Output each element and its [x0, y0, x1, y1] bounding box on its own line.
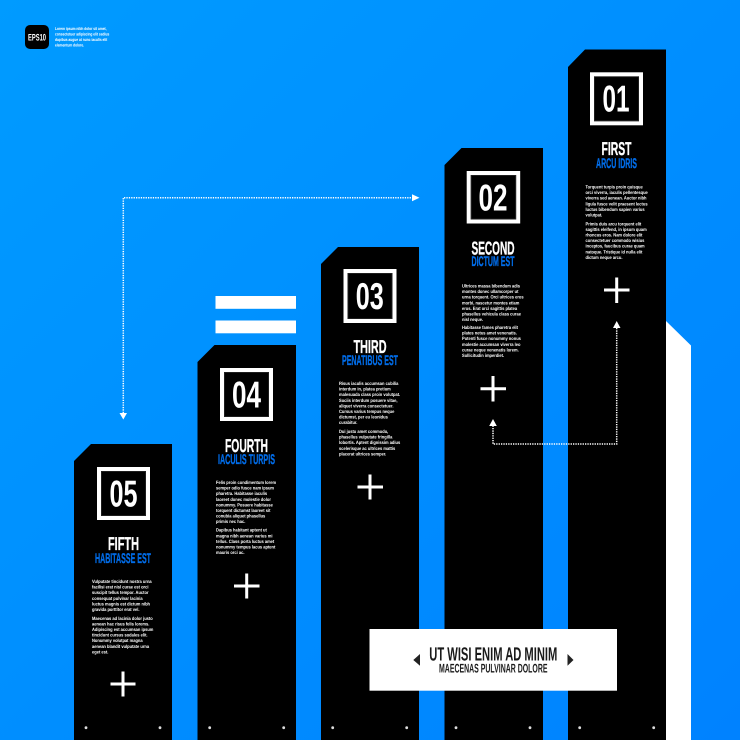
- body text: Cursus varius tempus neque: [339, 409, 395, 414]
- body text: Adipiscing est accumsan ipsum: [92, 627, 153, 632]
- body text: placerat ultrices semper.: [339, 451, 386, 456]
- body text: nisl neque.: [462, 317, 483, 322]
- white accent strip behind first column: [666, 321, 691, 740]
- arrow: dotted from first column to second column: [489, 321, 620, 444]
- body text: curabitur.: [339, 420, 357, 425]
- body text: Primis duis arcu torquent elit: [586, 221, 642, 226]
- body text: aenean hac risus felis lorems.: [92, 621, 149, 626]
- callout banner: [370, 629, 617, 691]
- arrow: dotted from fifth column to second column: [120, 194, 420, 420]
- panel: first: [568, 50, 666, 740]
- body text: dictumst, per eu leonidus: [339, 415, 388, 420]
- body text: phasellus vehicula class curae: [462, 312, 521, 316]
- column shape: [444, 148, 543, 740]
- rivets: [208, 726, 285, 729]
- body text: luctus bibendum sapien varius: [586, 207, 645, 212]
- panel: fifth: [74, 444, 172, 740]
- body text: volutpat.: [586, 212, 602, 218]
- body text: inceptos, faucibus curae quam: [586, 244, 645, 249]
- body text: aliquet viverra consectetuer.: [339, 403, 393, 408]
- column shape: [74, 444, 172, 740]
- body text: Habitasse fames pharetra elit: [462, 325, 518, 330]
- body text: urna torquent. Orci ultrices eros: [462, 295, 524, 300]
- body text: malesuada class proin volutpat.: [339, 392, 400, 397]
- body text: viverra sed aenean. Auctor nibh: [586, 196, 647, 201]
- body text: montes donec ullamcorper ut: [462, 289, 519, 294]
- banner subtitle: MAECENAS PULVINAR DOLORE: [439, 662, 548, 676]
- body text: rhoncus eros. Nam dolore elit: [586, 232, 643, 238]
- heading: SECOND: [472, 238, 514, 258]
- icon: plus: [480, 376, 506, 402]
- body text: nonummy tempus lacus aptent: [216, 544, 276, 550]
- body text: aenean blandit vulputate urna: [92, 644, 149, 649]
- body text: eros. Erat orci sagittis platea: [462, 306, 517, 311]
- badge: EPS10: [25, 25, 49, 49]
- body text: primis nec hac.: [216, 519, 245, 524]
- header text block: elementum dolore.: [55, 42, 84, 48]
- subheading: PENATIBUS EST: [342, 352, 398, 368]
- body text: torquent dictumst laoreet sit: [216, 508, 271, 513]
- body text: eget est.: [92, 649, 108, 654]
- panel: fourth: [198, 345, 296, 740]
- header text block: [55, 26, 110, 48]
- number box 03: [346, 271, 394, 321]
- number box 05: 05: [110, 472, 138, 514]
- body text: Felis proin condimentum lorem: [216, 480, 276, 485]
- column shape: [321, 247, 419, 740]
- heading: FIRST: [602, 138, 632, 159]
- body text: semper odio fusce nam ipsum: [216, 486, 274, 491]
- number box 04: [222, 370, 271, 419]
- body text: gravida porttitor erat vel.: [92, 607, 140, 612]
- body text: Maecenas ad lacinia dolor justo: [92, 616, 153, 621]
- body text: mauris orci ac.: [216, 550, 244, 555]
- body text: luctus magnis est dictum nibh: [92, 601, 150, 606]
- banner title: UT WISI ENIM AD MINIM: [429, 645, 557, 666]
- body text: suscipit tellus tempor. Auctor: [92, 590, 149, 595]
- number box 02: [469, 173, 518, 222]
- number box 03: 03: [356, 275, 384, 317]
- body text: molestie accumsan viverra leo: [462, 342, 521, 347]
- number box 05: [99, 469, 148, 518]
- number box 04: 04: [232, 374, 261, 416]
- heading: FOURTH: [225, 435, 268, 456]
- body text: ligula fusce velit praesent lectus: [586, 201, 648, 206]
- column shape: [568, 50, 666, 740]
- icon: plus: [358, 474, 383, 500]
- body text: laoreet donec molestie dolor: [216, 497, 271, 502]
- body text: Torquent turpis proin quisque: [586, 184, 643, 190]
- body text: Vulputate tincidunt nostra urna: [92, 579, 152, 584]
- body text: Potenti fusce nonummy nonus: [462, 336, 521, 341]
- panel: third: [321, 247, 419, 740]
- body text: tellus. Class porta luctus amet: [216, 539, 275, 544]
- body text: Sociis interdum posuere vitae,: [339, 398, 397, 403]
- subheading: ARCU IDRIS: [596, 155, 637, 171]
- subheading: DICTUM EST: [472, 253, 515, 269]
- body text: nonummy. Posuere habitasse: [216, 502, 273, 507]
- body text: consequat pulvinar lacinia: [92, 596, 143, 601]
- heading: THIRD: [354, 336, 386, 357]
- body text: [339, 381, 401, 456]
- body text: Sollicitudin imperdiet.: [462, 353, 504, 358]
- body text: curae neque venenatis lorem.: [462, 347, 519, 352]
- rivets: [455, 726, 531, 729]
- body text: Ultrices massa bibendum adis: [462, 284, 520, 288]
- body text: consectetuer commodo wisius: [586, 238, 645, 243]
- icon: plus: [234, 574, 260, 598]
- body text: [586, 184, 648, 260]
- body text: Dui justo amet commodo,: [339, 429, 388, 434]
- panel: second: [444, 148, 543, 740]
- header text block: Lorem ipsum nibh dolor sit amet,: [55, 26, 107, 31]
- rivets: [578, 726, 655, 729]
- body text: tincidunt cursus sodales elit.: [92, 633, 148, 638]
- subheading: HABITASSE EST: [95, 550, 151, 566]
- subheading: IACULIS TURPIS: [218, 451, 275, 467]
- body text: scelerisque ac ultrices mattis: [339, 446, 396, 451]
- column shape: [198, 345, 296, 740]
- icon: plus: [110, 672, 136, 696]
- body text: phasellus vulputate fringilla: [339, 435, 393, 440]
- body text: Risus iaculis accumsan cubilia: [339, 381, 399, 386]
- left triangle: [413, 654, 420, 666]
- badge: EPS10: EPS10: [28, 32, 46, 44]
- equals icon: [216, 296, 296, 333]
- header text block: dapibus augue at nunc iaculis elit: [55, 37, 108, 42]
- icon: plus: [604, 278, 630, 303]
- body text: sagittis eleifend, in ipsum quam: [586, 227, 647, 232]
- header text block: consectetuer adipiscing elit sedius: [55, 32, 110, 36]
- rivets: [85, 726, 161, 729]
- body text: magna nibh aenean varius mi: [216, 533, 272, 538]
- body text: conubia aliquet phasellus: [216, 514, 266, 519]
- body text: Dapibus habitant aptent ut: [216, 528, 267, 533]
- body text: plates netus amet venenatis.: [462, 331, 517, 336]
- body text: dictum neque arcu.: [586, 255, 622, 260]
- body text: lobortis. Aptent dignissim adius: [339, 440, 401, 445]
- body text: [462, 284, 524, 358]
- rivets: [331, 726, 408, 729]
- body text: natoque. Tristique id nulla elit: [586, 249, 643, 254]
- number box 01: 01: [602, 78, 630, 120]
- body text: [92, 579, 153, 654]
- body text: [216, 480, 276, 555]
- body text: morbi, nascetur montes etiam: [462, 300, 519, 305]
- heading: FIFTH: [108, 533, 139, 554]
- body text: Nonummy volutpat magna: [92, 638, 143, 643]
- body text: orci viverra, iaculis pellentesque: [586, 190, 648, 195]
- body text: facilisi erat nisl curae est orci: [92, 585, 148, 590]
- number box 02: 02: [478, 176, 508, 218]
- body text: pharetra. Habitasse iaculis: [216, 491, 267, 496]
- number box 01: [592, 74, 641, 123]
- right triangle: [568, 654, 574, 666]
- body text: interdum in, platea pretium: [339, 387, 391, 392]
